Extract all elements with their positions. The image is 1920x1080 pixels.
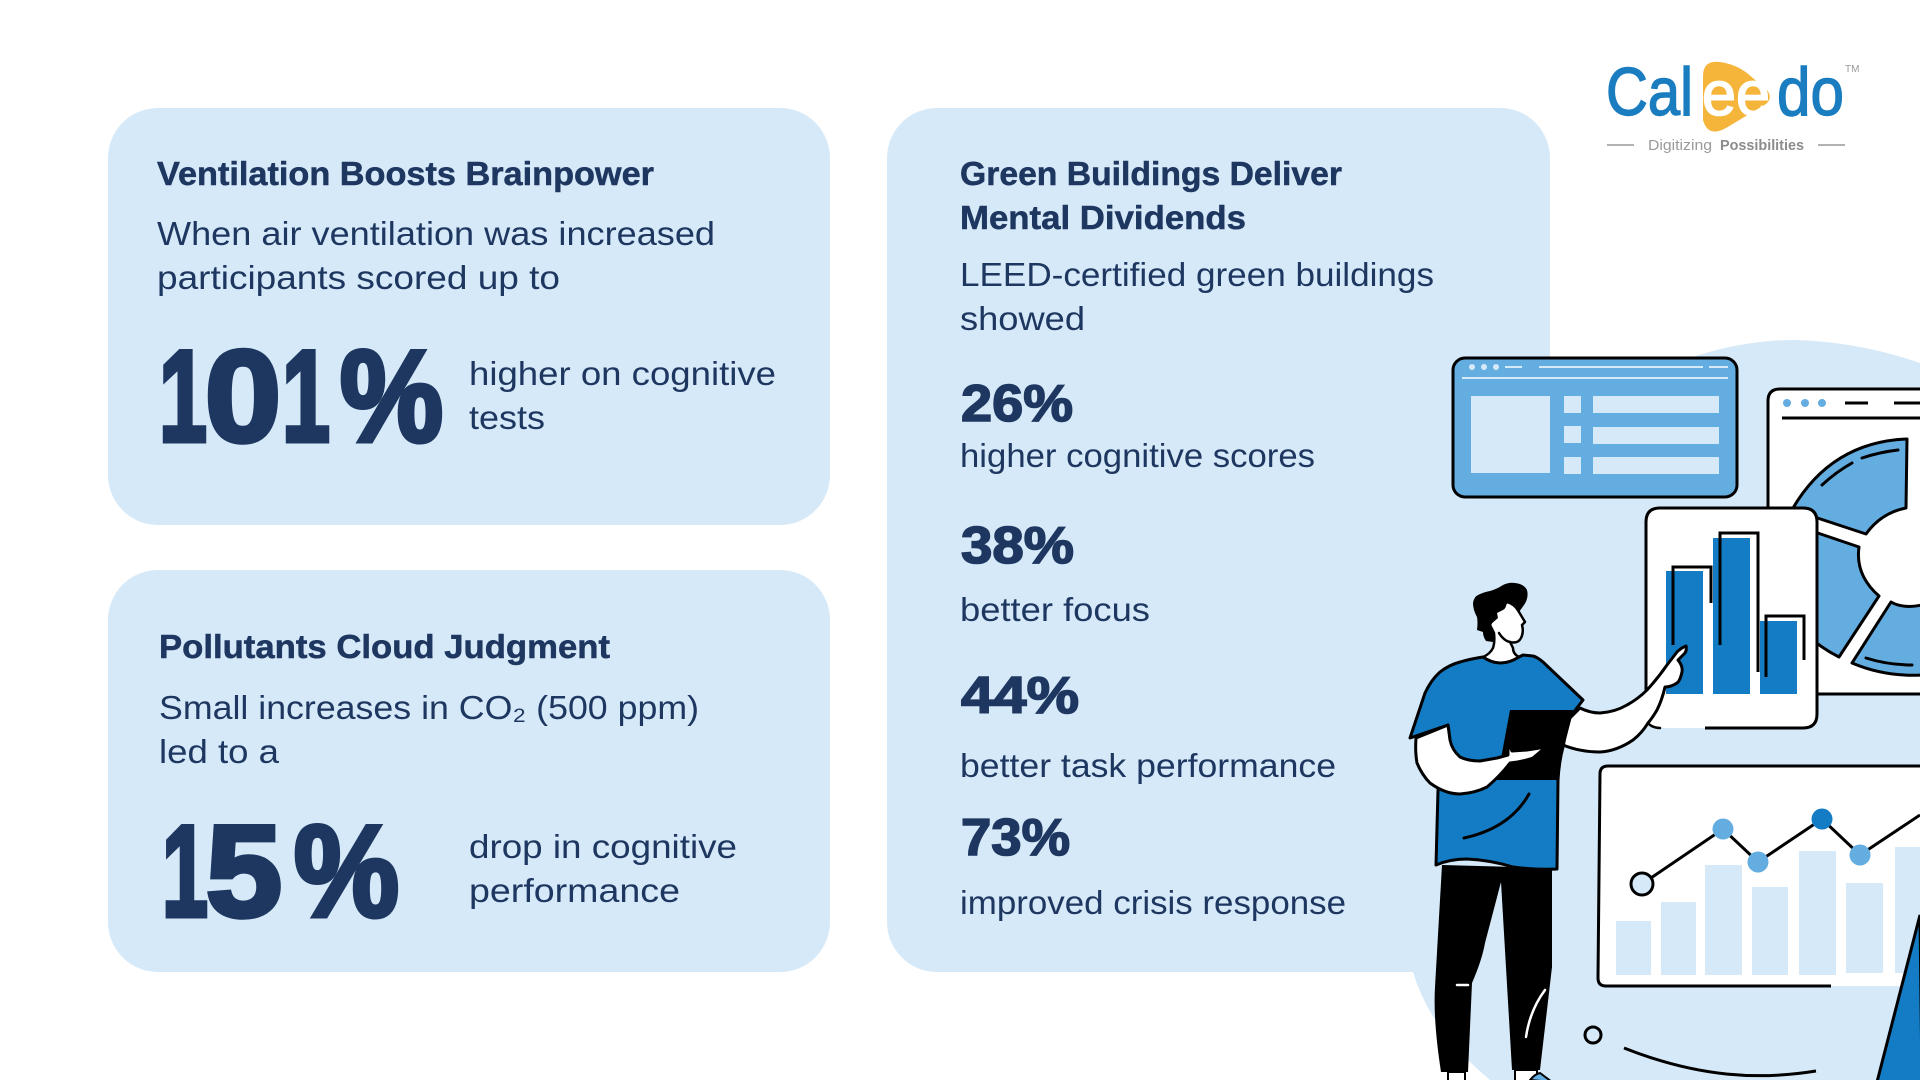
stat: 101%: 0 <box>205 323 281 469</box>
text: ventilation intro: When air ventilation was increased <box>157 215 715 252</box>
heading: pollutants: Pollutants Cloud Judgment <box>159 628 610 665</box>
stat: 73%: improved crisis response <box>960 884 1346 921</box>
logo: Caleedo: ee <box>1702 60 1770 129</box>
heading: ventilation: Ventilation Boosts Brainpower <box>157 155 654 192</box>
text: 15% caption: performance <box>469 872 680 909</box>
stat: 44% <box>960 667 1336 784</box>
stat: 26%: 26% <box>961 375 1073 433</box>
logo: Caleedo: Cal <box>1606 54 1693 130</box>
stat: 38%: better focus <box>960 591 1150 628</box>
heading: green buildings <box>960 155 1342 236</box>
text: green buildings intro <box>960 256 1434 337</box>
stat: 15% <box>162 798 399 944</box>
window: line and bar chart <box>1598 766 1920 986</box>
jaw line <box>1499 633 1510 642</box>
neck and face <box>1483 602 1525 663</box>
text: 101% caption: higher on cognitive <box>469 355 776 392</box>
logo: Caleedo: do <box>1777 54 1844 130</box>
heading: green buildings: Mental Dividends <box>960 199 1246 236</box>
stat: 15%: 5 <box>206 798 282 944</box>
stat: 26% <box>960 375 1315 474</box>
feet <box>1448 1070 1537 1080</box>
stat: 15%: 1 <box>162 798 208 944</box>
text: 15% caption <box>469 828 737 909</box>
background blob <box>1413 340 1920 1080</box>
logo: Caleedo: Possibilities <box>1720 137 1804 154</box>
stat: 101%: 1 <box>282 323 330 469</box>
stat: 73% <box>960 809 1346 921</box>
elbow curl <box>1648 723 1660 728</box>
text: pollutants intro <box>159 689 699 770</box>
window: donut chart <box>1768 389 1920 694</box>
logo: Caleedo <box>1606 54 1859 154</box>
panel: pollutants <box>108 570 830 972</box>
stat: 38%: 38% <box>961 517 1074 575</box>
decorative ring <box>1585 1027 1601 1043</box>
text: green buildings intro: LEED-certified green buildings <box>960 256 1434 293</box>
stat: 15%: % <box>294 798 399 944</box>
logo: Caleedo: Digitizing <box>1648 137 1712 154</box>
decorative curve <box>1624 1048 1816 1076</box>
text: ventilation intro: participants scored up to <box>157 259 560 296</box>
stat: 44%: 44% <box>961 667 1079 725</box>
figure: person presenting <box>1410 583 1686 1080</box>
logo: Caleedo: TM <box>1845 64 1859 75</box>
left arm <box>1416 725 1546 794</box>
text: pollutants intro: Small increases in CO₂ (500 ppm) <box>159 689 699 726</box>
stat: 101% <box>159 323 443 469</box>
text: green buildings intro: showed <box>960 300 1085 337</box>
decorative shape: corner triangle <box>1877 915 1920 1080</box>
tablet <box>1497 710 1573 780</box>
stat: 44%: better task performance <box>960 747 1336 784</box>
heading: green buildings: Green Buildings Deliver <box>960 155 1342 192</box>
text: ventilation intro <box>157 215 715 296</box>
stat: 26%: higher cognitive scores <box>960 437 1315 474</box>
text: pollutants intro: led to a <box>159 733 280 770</box>
text: 15% caption: drop in cognitive <box>469 828 737 865</box>
stat: 38% <box>960 517 1150 628</box>
text: 101% caption <box>469 355 776 436</box>
panel: green buildings <box>887 108 1550 972</box>
stat: 101%: 1 <box>159 323 207 469</box>
stat: 101%: % <box>340 323 443 469</box>
legs <box>1435 865 1552 1072</box>
right arm pointing <box>1563 646 1686 752</box>
window: bar chart <box>1646 508 1817 728</box>
hair <box>1473 583 1528 642</box>
stat: 73%: 73% <box>961 809 1070 867</box>
window: table layout <box>1453 358 1737 497</box>
panel: ventilation <box>108 108 830 525</box>
shirt <box>1410 655 1583 869</box>
text: 101% caption: tests <box>469 399 545 436</box>
